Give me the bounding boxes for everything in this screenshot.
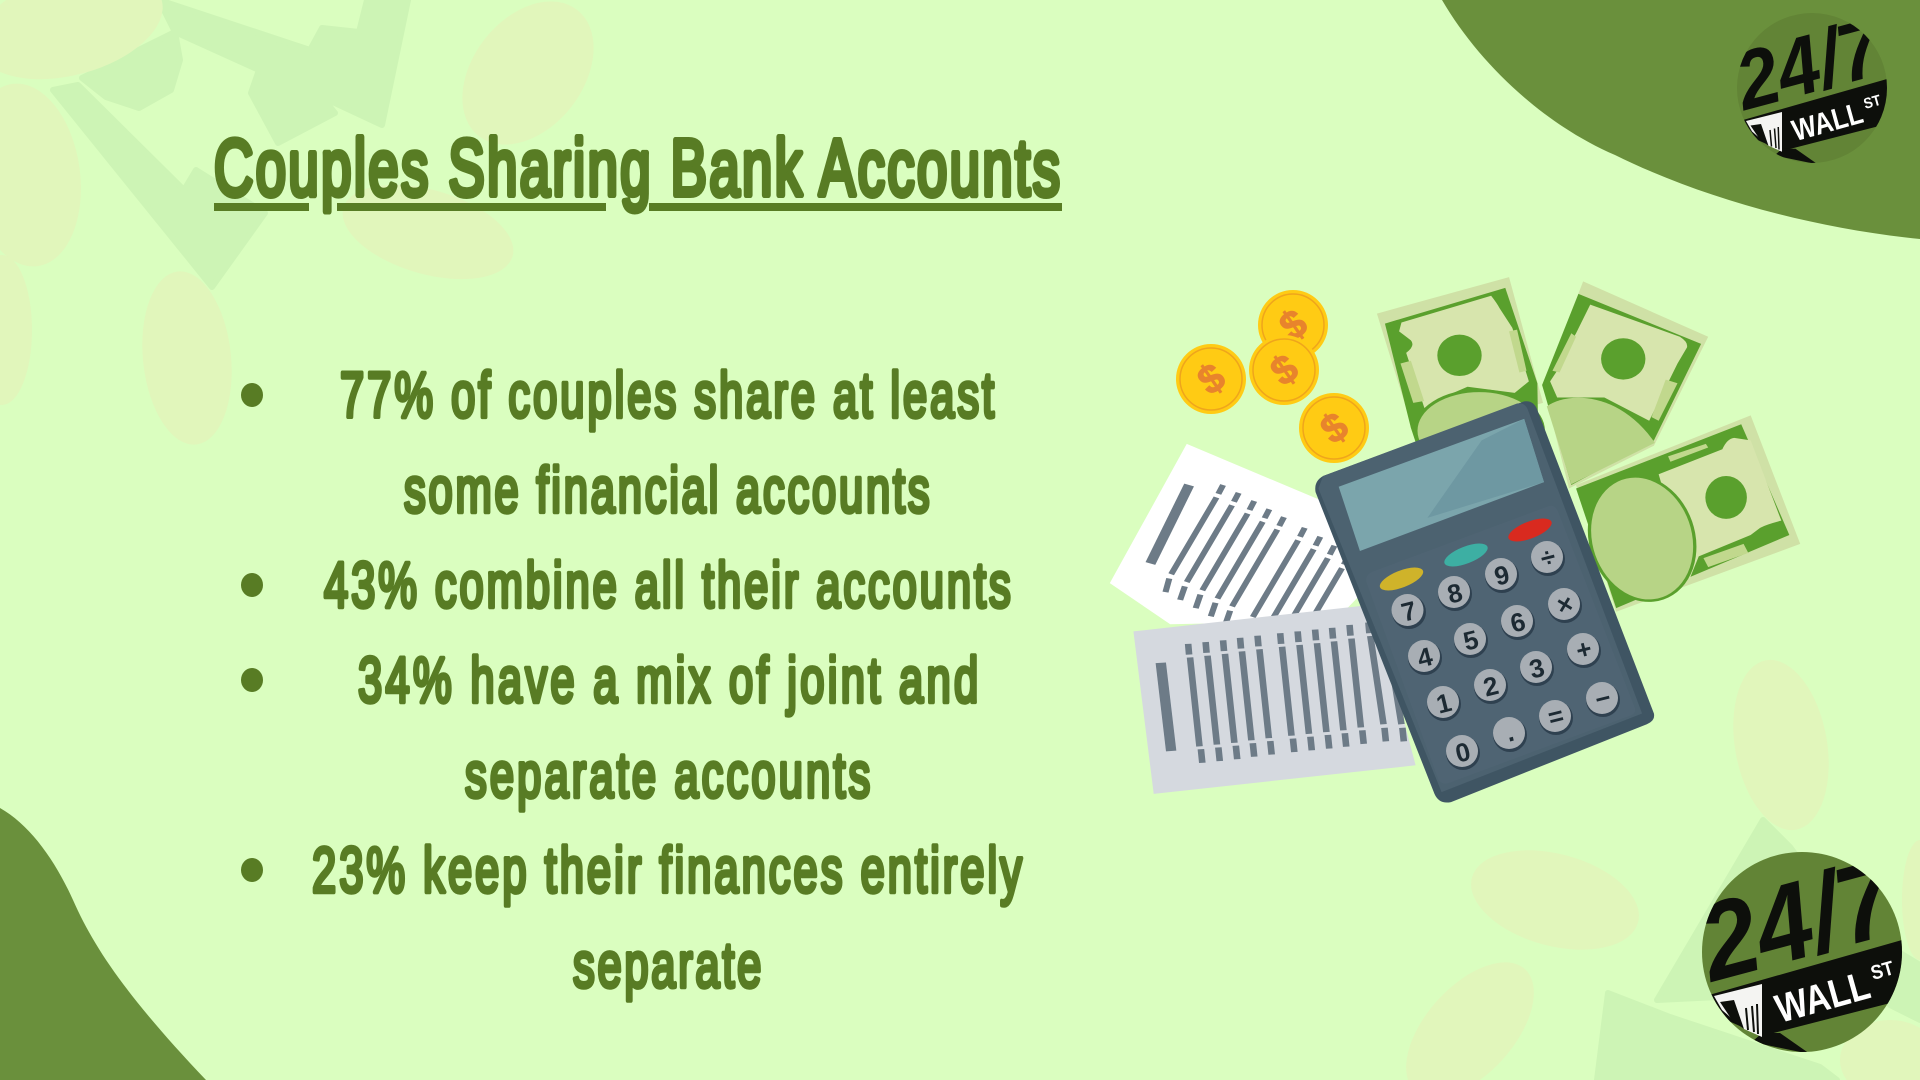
icon: gold coins: $	[1313, 404, 1356, 453]
icon: calculator keys: ×	[1554, 588, 1576, 621]
icon: calculator keys: 6	[1507, 606, 1528, 639]
icon: calculator keys: 2	[1480, 670, 1501, 703]
bullet item: 77%	[241, 359, 994, 526]
logo: 24/7 Wall St top right: ST	[1862, 92, 1883, 113]
icon: calculator keys: =	[1545, 700, 1567, 733]
icon: white receipt	[1110, 444, 1373, 645]
icon: calculator keys: .	[1503, 717, 1517, 748]
title: Couples Sharing Bank Accounts	[214, 124, 1060, 213]
icon: calculator keys: +	[1573, 633, 1595, 666]
icon: calculator keys: 4	[1414, 641, 1436, 674]
icon: calculator keys: 9	[1491, 559, 1512, 592]
icon: calculator keys: ÷	[1537, 541, 1558, 574]
decorative corner: bottom left	[0, 808, 206, 1080]
bullet item: 77%: 77% of couples share at least	[340, 359, 994, 431]
icon: calculator body	[1315, 401, 1654, 803]
illustration: money, receipts and calculator	[1110, 277, 1800, 803]
logo: 24/7 Wall St top right: 24/7	[1724, 0, 1895, 128]
bullet item: 34%: 34% have a mix of joint and	[358, 644, 978, 716]
icon: gold coins: $	[1190, 355, 1233, 404]
bullet item: 23%	[241, 834, 1022, 1001]
bullet item: 23%: 23% keep their finances entirely	[312, 834, 1022, 906]
icon: calculator keys: −	[1592, 682, 1614, 715]
bullet item: 23%: separate	[573, 929, 761, 1001]
icon: calculator function buttons	[1377, 514, 1555, 595]
icon: gold coins: $	[1263, 346, 1306, 395]
icon: calculator keys: 1	[1433, 687, 1454, 720]
icon: calculator keys: 0	[1452, 736, 1473, 769]
icon: calculator keys: 5	[1460, 624, 1481, 657]
icon: banknote two	[1542, 281, 1708, 489]
icon: gold coins	[1176, 290, 1369, 463]
icon: grey receipt	[1133, 605, 1416, 794]
logo: 24/7 Wall St bottom right: 24/7	[1685, 835, 1912, 1006]
bullet item: 34%: separate accounts	[465, 739, 870, 811]
logo: 24/7 Wall St bottom right	[1702, 852, 1902, 1052]
icon: banknote three	[1576, 415, 1800, 612]
icon: banknote one	[1377, 277, 1543, 471]
bullet item: 43%: 43% combine all their accounts	[324, 549, 1011, 621]
logo: 24/7 Wall St bottom right: WALL	[1771, 963, 1875, 1032]
logo: 24/7 Wall St bottom right: ST	[1868, 957, 1896, 985]
decorative corner: top right	[1442, 0, 1920, 239]
icon: calculator keys: 7	[1398, 595, 1419, 628]
icon: calculator keys: 8	[1444, 577, 1465, 610]
bullet list of statistics	[241, 359, 1022, 1001]
logo: 24/7 Wall St top right: WALL	[1789, 97, 1867, 148]
bullet item: 34%	[241, 644, 978, 811]
icon: gold coins: $	[1272, 301, 1315, 350]
bullet item: 77%: some financial accounts	[404, 454, 930, 526]
logo: 24/7 Wall St top right	[1737, 13, 1887, 163]
icon: calculator keys: 3	[1526, 652, 1547, 685]
icon: calculator keys	[1392, 541, 1620, 770]
